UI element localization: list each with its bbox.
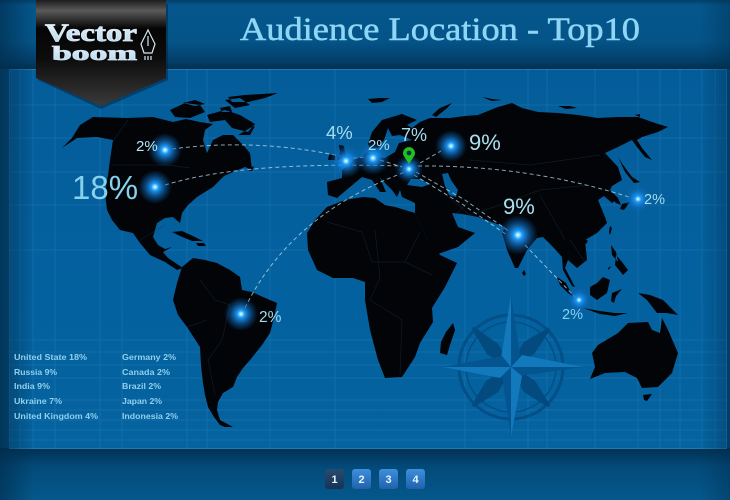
percentage labels: 9% (469, 130, 501, 155)
legend: country list: United Kingdom 4% (14, 411, 98, 421)
Arctic islands (170, 93, 278, 171)
footer band (0, 448, 730, 500)
icon: pen nib (141, 30, 155, 60)
Eurasia (327, 103, 668, 287)
North America (62, 117, 252, 270)
percentage labels: 7% (401, 125, 427, 145)
New Guinea (638, 293, 678, 315)
Britain and Ireland (328, 145, 347, 160)
legend: country list: Indonesia 2% (122, 411, 178, 421)
legend: country list (14, 352, 178, 421)
Arctic Russia islands (368, 97, 640, 117)
Sakhalin and Japan (611, 157, 640, 210)
South America (173, 258, 277, 427)
title: Audience Location - Top10 (240, 12, 640, 48)
percentage labels: 2% (136, 138, 158, 155)
pagination (325, 469, 425, 489)
icon: green location pin (403, 147, 415, 164)
country borders (112, 120, 600, 395)
panel: map area (9, 69, 727, 449)
legend: country list: Germany 2% (122, 352, 176, 362)
Madagascar (440, 323, 455, 355)
pagination: 2 (358, 474, 365, 486)
percentage labels: 2% (259, 309, 282, 326)
legend: country list: Russia 9% (14, 367, 57, 377)
Southeast Asia islands (522, 226, 628, 316)
percentage labels: 4% (326, 122, 353, 143)
connection arcs (165, 145, 632, 308)
logo ribbon (36, 0, 168, 109)
percentage labels: 2% (368, 137, 390, 154)
percentage labels: 9% (503, 194, 535, 219)
location glows (138, 130, 652, 331)
legend: country list: Canada 2% (122, 367, 170, 377)
logo ribbon: boom (52, 43, 138, 65)
logo ribbon: Vector (45, 20, 137, 47)
Africa (307, 197, 457, 378)
pagination: 4 (412, 474, 419, 486)
legend: country list: Brazil 2% (122, 381, 161, 391)
pagination: 3 (385, 474, 392, 486)
Cuba and Caribbean (172, 231, 206, 246)
world map (62, 93, 678, 427)
Australia (590, 318, 678, 401)
legend: country list: Ukraine 7% (14, 396, 62, 406)
percentage labels: 2% (644, 192, 665, 208)
compass rose (443, 295, 583, 437)
header band (0, 0, 730, 69)
percentage labels (72, 122, 665, 326)
percentage labels: 2% (562, 307, 583, 323)
legend: country list: India 9% (14, 381, 50, 391)
percentage labels: 18% (72, 169, 138, 206)
legend: country list: United State 18% (14, 352, 87, 362)
pagination: 1 (331, 474, 338, 486)
legend: country list: Japan 2% (122, 396, 162, 406)
